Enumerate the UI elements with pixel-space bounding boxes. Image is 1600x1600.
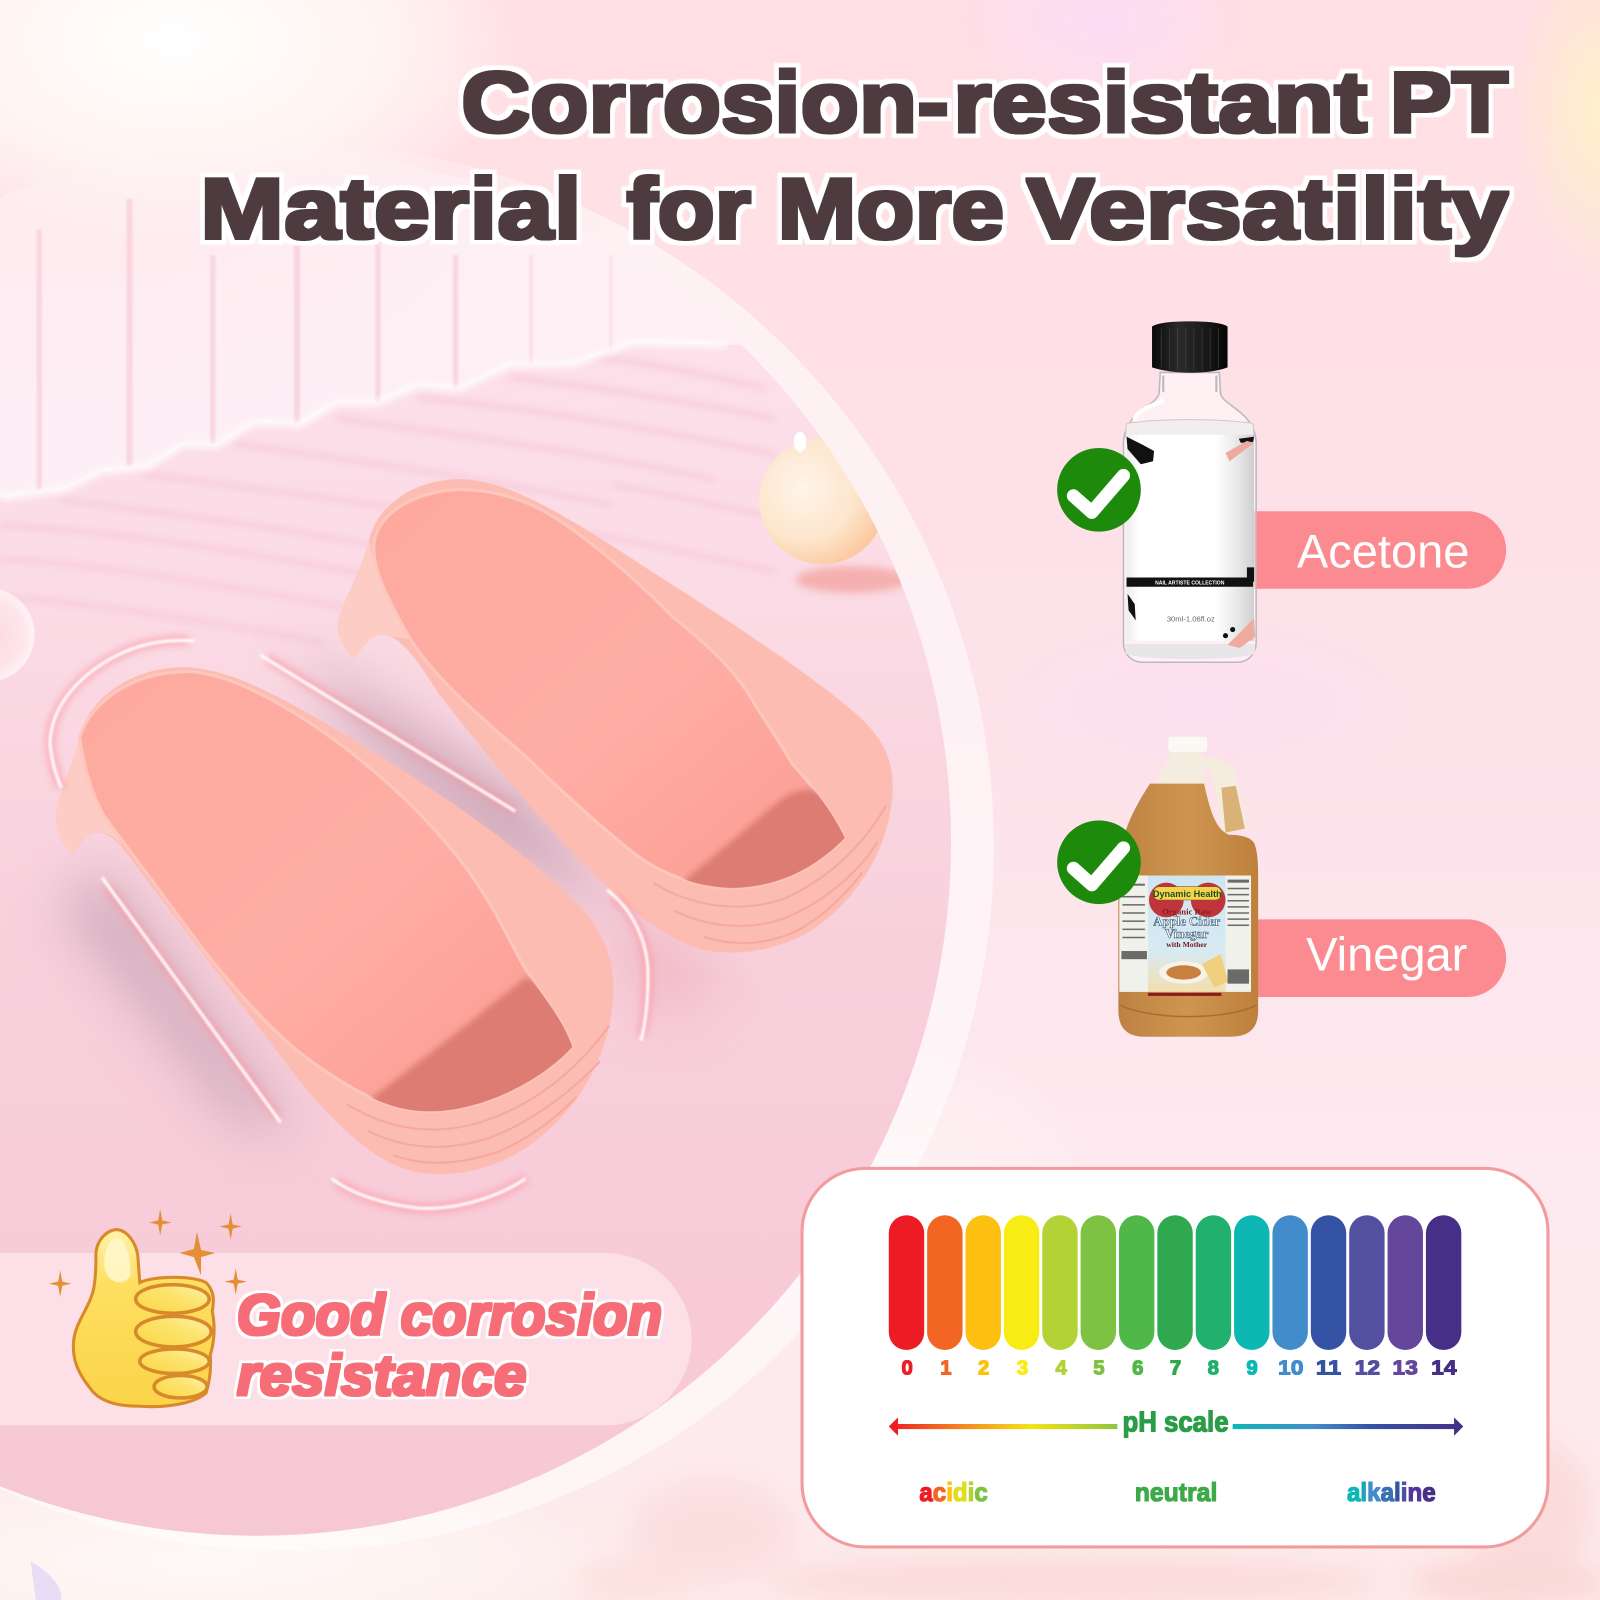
callout text: Good corrosion (237, 1284, 662, 1348)
motion swooshes (50, 640, 648, 1208)
pH numbers: 12 (1355, 1357, 1380, 1379)
title: Corrosion- (461, 55, 949, 151)
pH numbers: 9 (1246, 1357, 1258, 1379)
stair region (0, 337, 980, 1561)
callout pill background (0, 1253, 692, 1426)
pH numbers: 11 (1316, 1357, 1341, 1379)
pH numbers: 14 (1431, 1357, 1457, 1379)
panel: product scene in circle (0, 133, 980, 1561)
pH numbers: 8 (1208, 1357, 1219, 1379)
label pill: Acetone (1250, 511, 1506, 589)
icon: green check vinegar (1057, 820, 1141, 904)
title: More (778, 161, 1004, 257)
callout text: resistance (237, 1344, 527, 1408)
pH numbers: 5 (1093, 1357, 1105, 1379)
pH numbers: 2 (978, 1357, 989, 1379)
title: resistant (953, 55, 1367, 151)
bar chart: pH colour strips (889, 1215, 1461, 1350)
pH numbers: 1 (940, 1357, 952, 1379)
acidic label: acidic (919, 1479, 988, 1507)
title: PT (1390, 55, 1508, 151)
pH numbers: 3 (1017, 1357, 1028, 1379)
icon: vinegar jug: Dynamic Health (1153, 889, 1222, 899)
pH numbers: 7 (1170, 1357, 1181, 1379)
icon: acetone bottle (1123, 321, 1256, 662)
pH numbers: 13 (1392, 1357, 1418, 1379)
decorative white ring around the photo (0, 143, 994, 1551)
pH numbers: 6 (1132, 1357, 1143, 1379)
title: for (627, 161, 751, 257)
pillars and vertical lines (37, 189, 612, 490)
arrow: alkaline direction (1233, 1417, 1463, 1436)
callout text (237, 1284, 662, 1408)
icon: vinegar jug (1118, 737, 1258, 1037)
callout: good corrosion resistance (49, 1209, 662, 1408)
icon: sparkles (49, 1209, 247, 1297)
alkaline label: alkaline (1347, 1479, 1436, 1507)
arrow: acidic direction (889, 1417, 1117, 1436)
title (200, 55, 1509, 257)
icon: acetone bottle: 30ml-1.06fl.oz (1167, 614, 1215, 623)
sphere: left pearl (0, 588, 35, 682)
icon: vinegar jug: with Mother (1166, 940, 1208, 949)
scene base gradient (0, 202, 322, 496)
panel: pH scale card (802, 1168, 1548, 1547)
label pill: Acetone: Acetone (1297, 525, 1469, 577)
product: right insole (338, 479, 893, 953)
pH numbers: 10 (1278, 1357, 1304, 1379)
pH scale label: pH scale (1122, 1407, 1229, 1439)
icon: vinegar jug: Organic Raw (1162, 906, 1212, 916)
icon: thumbs up (73, 1230, 214, 1407)
label pill: Vinegar: Vinegar (1306, 928, 1467, 980)
icon: green check acetone (1057, 448, 1141, 532)
icon: vinegar jug: Apple Cider (1153, 915, 1221, 929)
title: Material (200, 161, 582, 257)
label pill: Vinegar (1250, 919, 1506, 997)
icon: acetone bottle: NAIL ARTISTE COLLECTION (1155, 581, 1225, 587)
icon: vinegar jug: Vinegar (1165, 927, 1209, 941)
title: Versatility (1027, 161, 1509, 257)
pH numbers: 0 (901, 1357, 913, 1379)
neutral label: neutral (1135, 1479, 1217, 1507)
pH numbers (901, 1357, 1457, 1379)
soft shadows around shoes (61, 653, 735, 1133)
pH numbers: 4 (1056, 1357, 1068, 1379)
stair edge glow (0, 343, 727, 498)
sphere: peach (759, 432, 908, 593)
product: left insole (56, 667, 613, 1174)
